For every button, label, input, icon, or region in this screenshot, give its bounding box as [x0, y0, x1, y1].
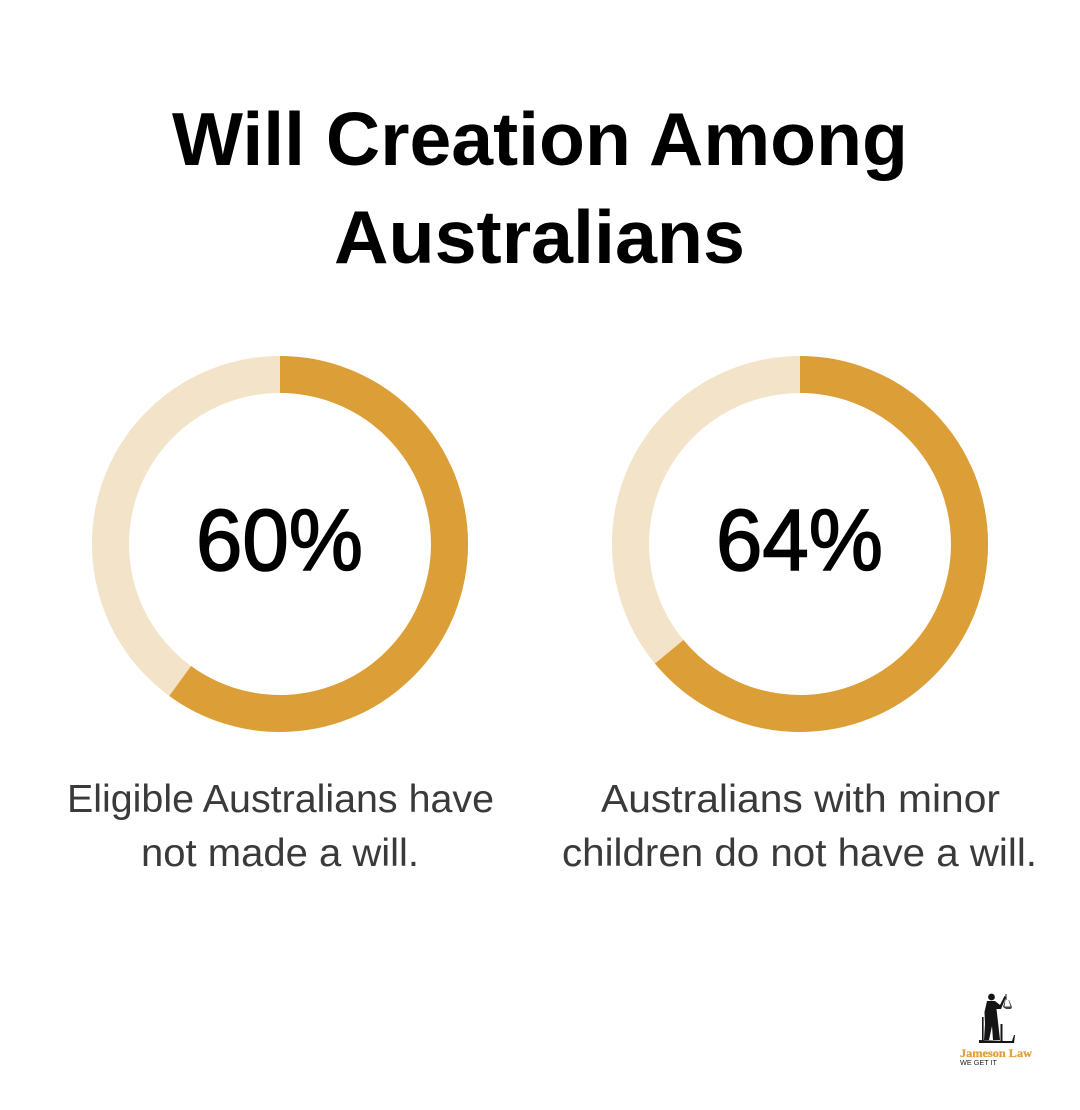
caption: eligible Australians: not made a will.: [141, 832, 419, 875]
donut chart: 64 percent: [630, 374, 970, 714]
caption: eligible Australians: [67, 778, 494, 875]
caption: Australians with minor children: children do not have a will.: [562, 832, 1037, 875]
donut chart: 60 percent: [110, 374, 450, 714]
caption: Australians with minor children: Australians with minor: [601, 778, 1000, 821]
title: [172, 97, 908, 279]
caption: Australians with minor children: [562, 778, 1037, 875]
title: Australians: [334, 195, 745, 279]
title: Will Creation Among: [172, 97, 908, 181]
caption: eligible Australians: Eligible Australians have: [67, 778, 494, 821]
panel: 60 percent statistic: [67, 374, 494, 875]
value: 64%: 64%: [716, 492, 883, 589]
icon: lady justice: [979, 994, 1015, 1043]
value: 60%: 60%: [196, 492, 363, 589]
logo name: Jameson Law: [960, 1048, 1033, 1060]
logo tagline: WE GET IT: [960, 1058, 997, 1067]
panel: 64 percent statistic: [562, 374, 1037, 875]
logo: Jameson Law: [960, 994, 1033, 1067]
